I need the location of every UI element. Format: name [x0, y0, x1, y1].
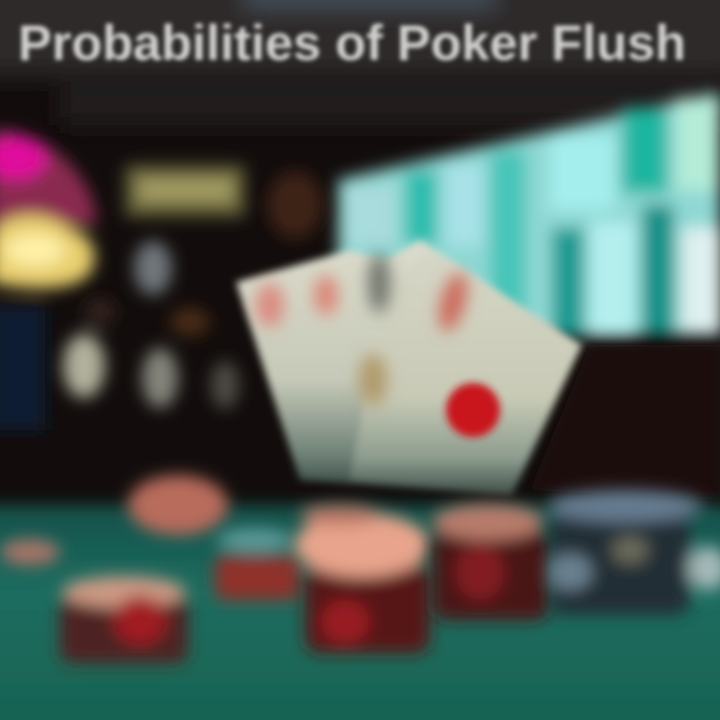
chip stack centre: [294, 505, 430, 653]
panel: teal bar wall: [338, 92, 720, 340]
dark table edge: [530, 345, 720, 500]
felt table: [0, 505, 720, 720]
chip stack front left: [60, 576, 188, 663]
chip stack centre small: [215, 528, 300, 600]
background lights: [63, 171, 323, 409]
panel: playing cards: [236, 240, 582, 495]
small gold sign: [125, 165, 245, 217]
chip stack right red: [432, 504, 550, 620]
title: Probabilities of Poker Flush: [18, 15, 686, 71]
chip stack back left: [0, 475, 228, 565]
chip stack right blue: [547, 490, 720, 615]
panel: poker chips: [0, 475, 720, 663]
top banner haze: [0, 0, 720, 125]
card pips: [256, 253, 472, 406]
panel: neon sign left: [0, 130, 97, 430]
